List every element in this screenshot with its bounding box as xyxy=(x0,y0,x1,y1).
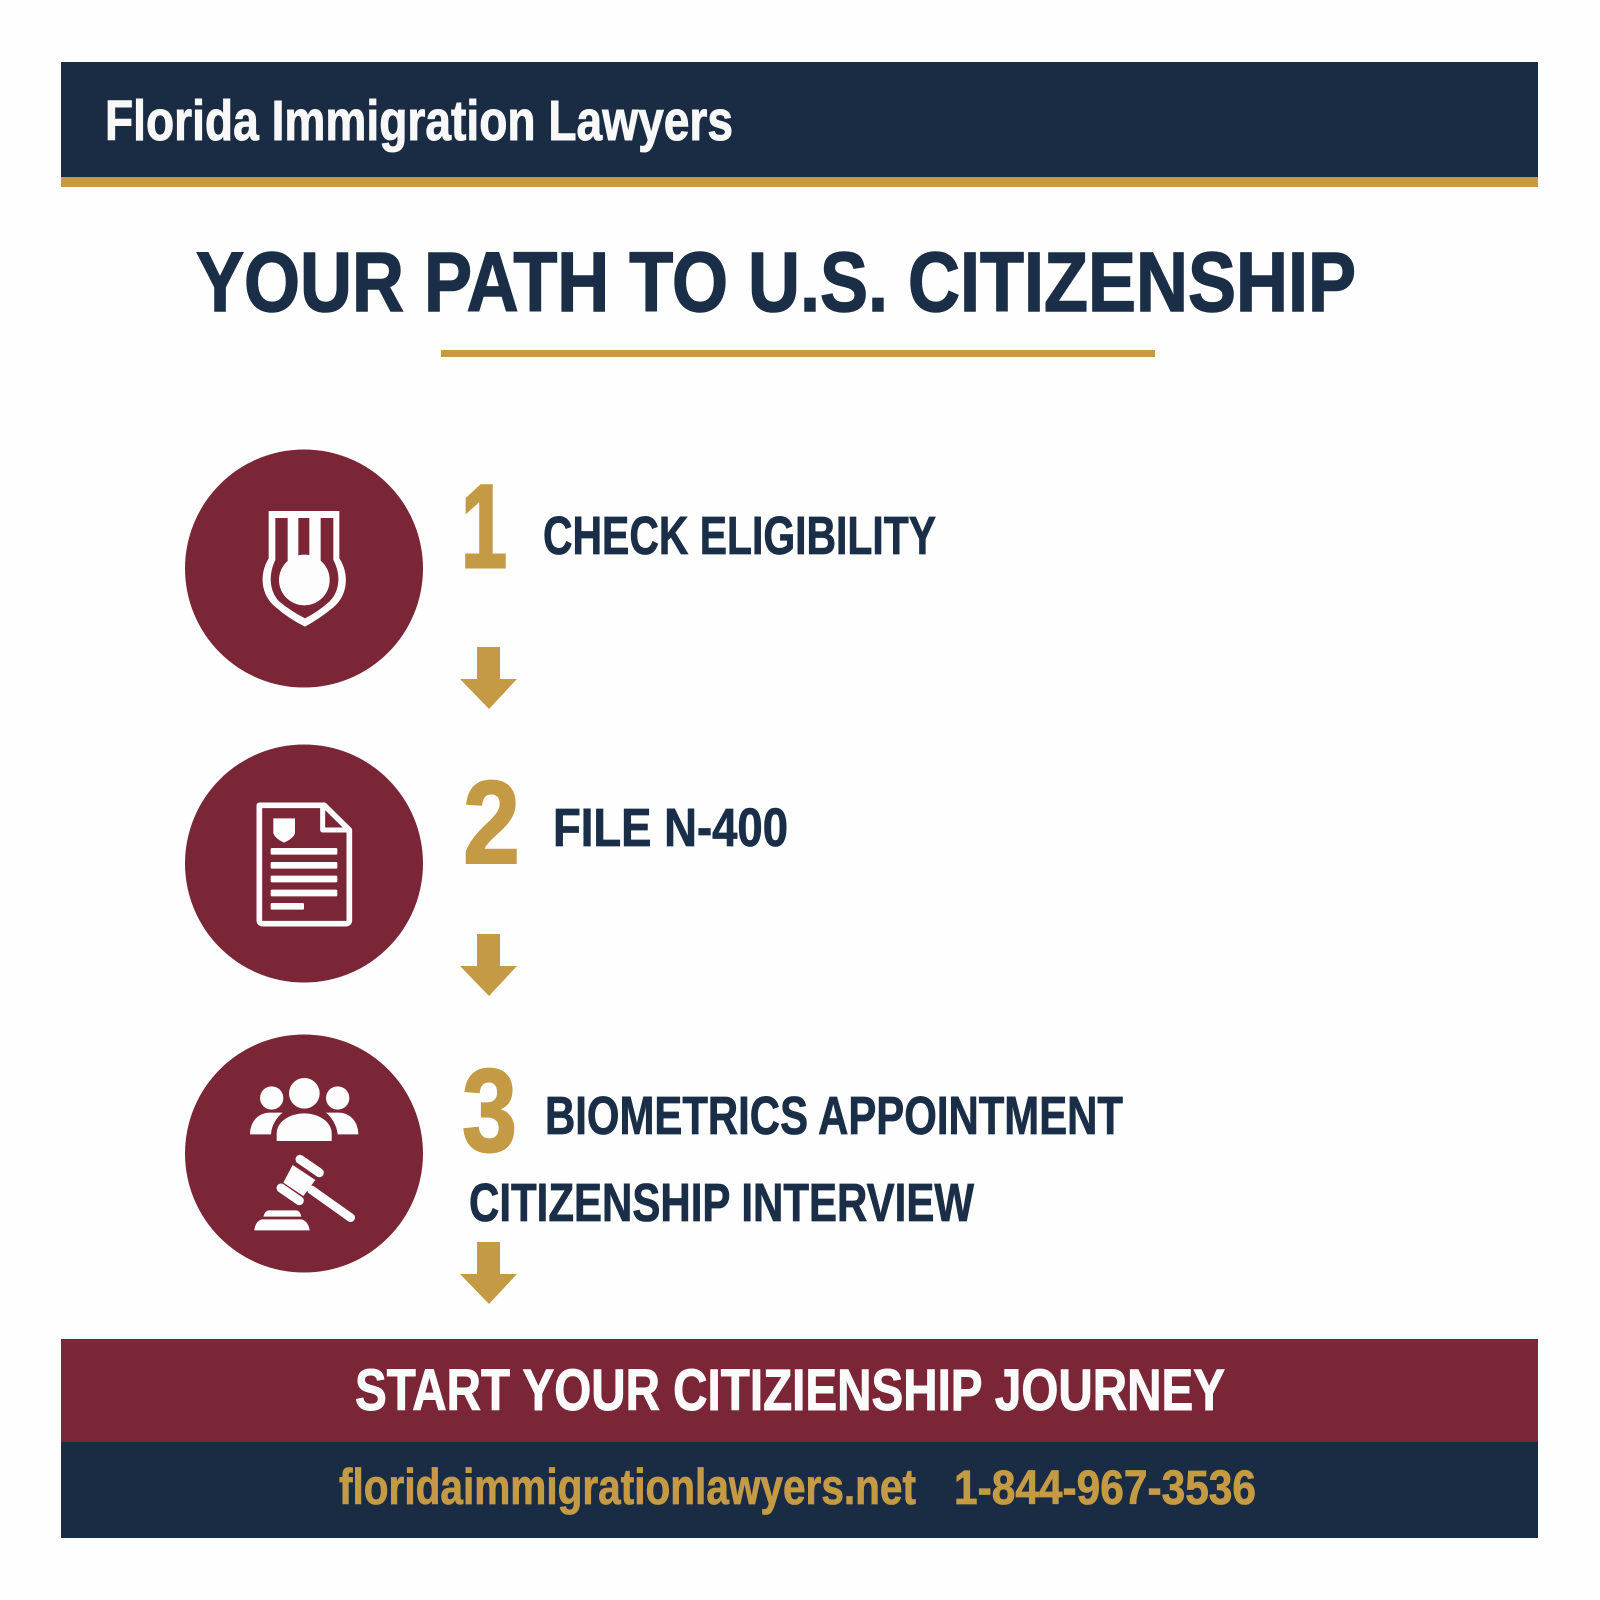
step number 3: 3 xyxy=(462,1045,517,1177)
title xyxy=(196,235,1356,357)
step 3 xyxy=(185,1034,1123,1272)
header band xyxy=(61,62,1538,187)
phone number: 1-844-967-3536 xyxy=(954,1462,1256,1515)
arrow 1 xyxy=(460,647,517,709)
icon: people and gavel xyxy=(185,1034,423,1272)
title: YOUR PATH TO U.S. CITIZENSHIP xyxy=(196,235,1356,329)
icon: medal shield xyxy=(185,450,423,688)
step label: citizenship interview: CITIZENSHIP INTERVIEW xyxy=(469,1173,974,1233)
header brand name: Florida Immigration Lawyers xyxy=(105,89,733,153)
step number 2: 2 xyxy=(463,757,520,889)
step label: biometrics appointment: BIOMETRICS APPOINTMENT xyxy=(545,1086,1123,1146)
step 2 xyxy=(185,744,788,982)
contact footer xyxy=(61,1442,1538,1538)
step label: check eligibility: CHECK ELIGIBILITY xyxy=(543,506,936,566)
call to action text: START YOUR CITIZIENSHIP JOURNEY xyxy=(355,1358,1225,1423)
step 1 xyxy=(185,450,936,688)
step number 1: 1 xyxy=(461,461,507,593)
icon: document xyxy=(185,744,423,982)
call to action banner xyxy=(61,1339,1538,1442)
arrow 2 xyxy=(460,934,517,996)
website: floridaimmigrationlawyers.net xyxy=(339,1459,916,1515)
arrow 3 xyxy=(460,1242,517,1304)
step label: file N-400: FILE N-400 xyxy=(553,798,788,858)
